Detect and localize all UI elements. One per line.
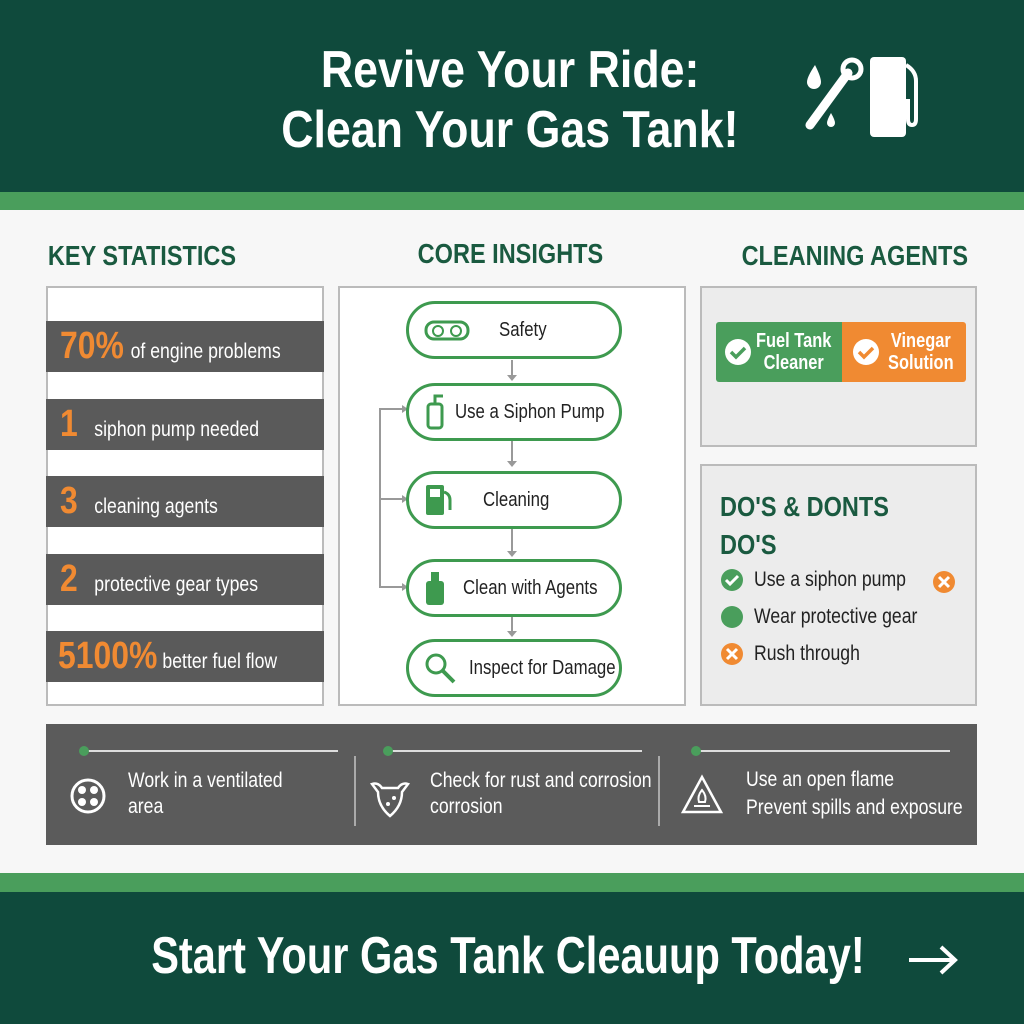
agent: vinegar solution: Vinegar bbox=[891, 330, 951, 352]
stat 4: 2 protective gear types bbox=[60, 558, 258, 600]
heading: core insights: CORE INSIGHTS bbox=[418, 238, 603, 269]
heading: key statistics: KEY STATISTICS bbox=[48, 240, 236, 271]
header bbox=[0, 0, 1024, 192]
heading: cleaning agents: CLEANING AGENTS bbox=[742, 240, 968, 271]
agent: vinegar solution: Solution bbox=[888, 352, 954, 374]
tip: ventilated bbox=[70, 746, 338, 818]
stat 3: 3 cleaning agents bbox=[60, 480, 218, 522]
title bbox=[281, 41, 739, 159]
agent: fuel tank cleaner bbox=[716, 322, 842, 382]
icon: fuel pump with wrench bbox=[806, 57, 918, 137]
stat 5 bbox=[46, 631, 324, 682]
stat 1 bbox=[46, 321, 324, 372]
heading: do's & donts: DO'S & DONTS bbox=[720, 491, 889, 522]
call to action: Start Your Gas Tank Cleauup Today! bbox=[151, 927, 864, 985]
footer bbox=[0, 873, 1024, 892]
tip: ventilated: Work in a ventilated bbox=[128, 769, 283, 792]
stat 1: 70% of engine problems bbox=[60, 325, 281, 367]
tip: ventilated: area bbox=[128, 795, 163, 818]
flow connectors bbox=[379, 360, 517, 637]
panel: cleaning agents bbox=[700, 286, 977, 447]
panel: do's and donts bbox=[700, 464, 977, 706]
tip: rust: corrosion bbox=[430, 795, 503, 818]
icon: x bbox=[933, 571, 955, 593]
step: inspect bbox=[406, 639, 622, 697]
item: rush: Rush through bbox=[754, 642, 860, 665]
panel: core insights bbox=[338, 286, 686, 706]
stat 2 bbox=[46, 399, 324, 450]
title: Clean Your Gas Tank! bbox=[281, 101, 739, 159]
step: cleaning: Cleaning bbox=[483, 488, 549, 510]
stat 2: 1 siphon pump needed bbox=[60, 403, 259, 445]
stat 5: 5100%better fuel flow bbox=[58, 635, 277, 677]
title: Revive Your Ride: bbox=[321, 41, 699, 99]
agent: fuel tank cleaner: Cleaner bbox=[764, 352, 824, 374]
item: protective gear: Wear protective gear bbox=[754, 605, 917, 628]
panel: safety tips bar bbox=[46, 724, 977, 845]
step: safety bbox=[406, 301, 622, 359]
tip: rust bbox=[370, 746, 652, 818]
stat 3 bbox=[46, 476, 324, 527]
step: clean with agents bbox=[406, 559, 622, 617]
step: clean with agents: Clean with Agents bbox=[463, 576, 597, 598]
agent: fuel tank cleaner: Fuel Tank bbox=[756, 330, 831, 352]
tip: flame: Use an open flame bbox=[746, 768, 894, 791]
stat 4 bbox=[46, 554, 324, 605]
step: siphon pump: Use a Siphon Pump bbox=[455, 400, 604, 422]
tip: flame: Prevent spills and exposure bbox=[746, 796, 963, 819]
icon: arrow bbox=[909, 946, 958, 974]
heading: do's & donts bbox=[720, 491, 889, 560]
tip: flame bbox=[681, 746, 963, 819]
tip: rust: Check for rust and corrosion bbox=[430, 769, 652, 792]
panel: key statistics bbox=[46, 286, 324, 706]
step: inspect: Inspect for Damage bbox=[469, 656, 616, 678]
agent: vinegar solution bbox=[842, 322, 966, 382]
step: cleaning bbox=[406, 471, 622, 529]
item: siphon pump: Use a siphon pump bbox=[754, 568, 906, 591]
step: siphon pump bbox=[406, 383, 622, 441]
heading: do's & donts: DO'S bbox=[720, 529, 777, 560]
step: safety: Safety bbox=[499, 318, 547, 340]
